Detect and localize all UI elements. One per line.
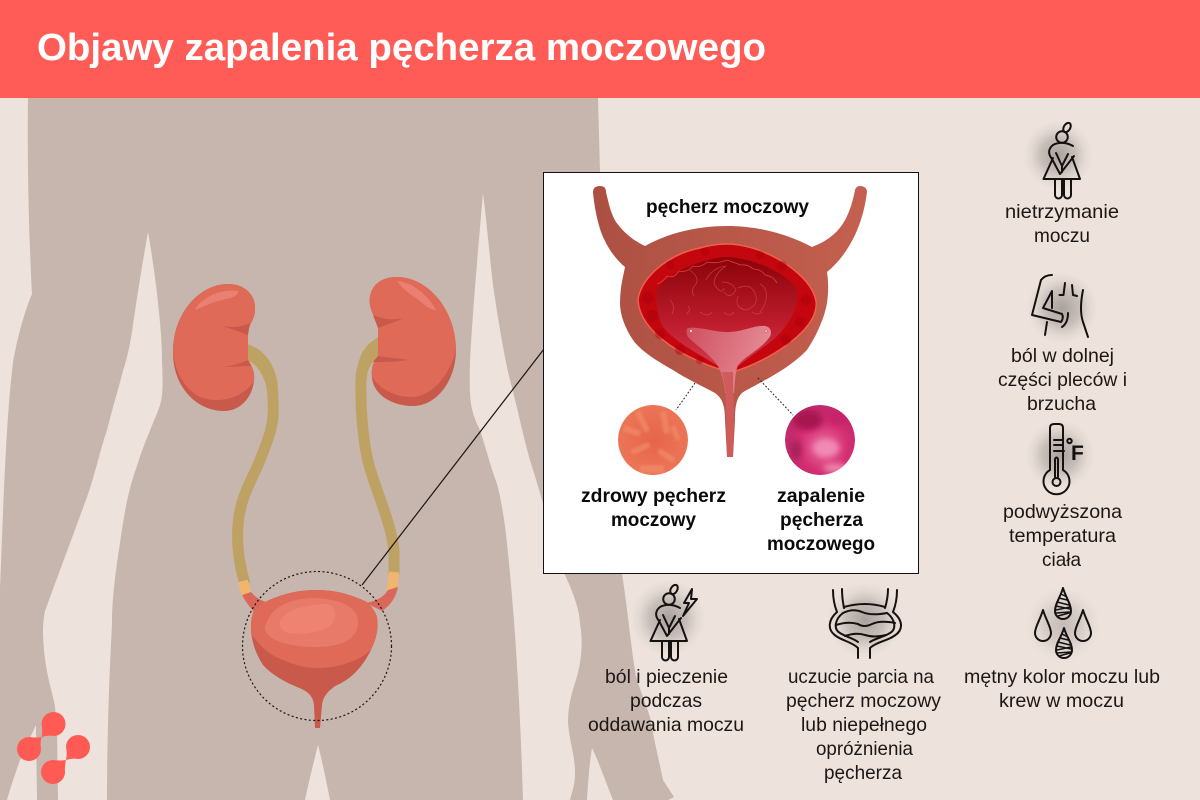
label: [1003, 501, 1122, 571]
symptom: fever: [1003, 420, 1122, 571]
label: brzucha: [1027, 393, 1096, 415]
label: nietrzymanie: [1005, 201, 1119, 223]
label: temperatura: [1009, 525, 1116, 547]
icon: bladder outline: [827, 582, 903, 658]
mucosa folds: [642, 248, 811, 364]
heading: bladder: pęcherz moczowy: [646, 196, 809, 218]
ureter red ends: [242, 587, 398, 612]
label: pęcherza: [824, 762, 902, 784]
label: [786, 666, 941, 784]
icon: thermometer: [1025, 420, 1095, 494]
label: opróżnienia: [816, 738, 913, 760]
symptom: cloudy urine or blood: [964, 587, 1160, 712]
logo: [17, 712, 90, 784]
vessel squiggles: [670, 266, 766, 315]
icon: woman with lightning: [630, 580, 706, 660]
label: healthy bladder: moczowy: [611, 509, 696, 531]
zoom connector line: [362, 349, 544, 585]
right kidney: [370, 277, 456, 406]
label: mętny kolor moczu lub: [964, 666, 1160, 688]
label: inflamed bladder: moczowego: [767, 533, 875, 555]
label: ból i pieczenie: [605, 666, 728, 688]
label: inflamed bladder: pęcherza: [780, 509, 863, 531]
ureter orange segments: [243, 572, 394, 596]
urinary tract illustration: [173, 277, 544, 735]
panel: bladder detail: [544, 172, 918, 574]
bladder: [250, 590, 378, 728]
icon: woman holding abdomen: [1023, 120, 1093, 198]
dotted connector healthy: [676, 383, 695, 410]
label: healthy bladder: [581, 485, 726, 531]
label: moczu: [1034, 225, 1090, 247]
body silhouette: [0, 98, 674, 800]
label: [588, 666, 744, 736]
symptom: incontinence: [1005, 120, 1119, 247]
left kidney: [173, 284, 255, 411]
symptom: urge and incomplete emptying: [786, 582, 941, 784]
label: części pleców i: [998, 369, 1127, 391]
label: [964, 666, 1160, 712]
symptom: back and abdomen pain: [998, 272, 1127, 415]
label: ból w dolnej: [1011, 345, 1114, 367]
left ureter: [238, 344, 278, 584]
label: inflamed bladder: [767, 485, 875, 555]
icon: thermometer: F: [1071, 442, 1084, 465]
title banner: [0, 0, 1200, 98]
dotted zoom circle: [242, 572, 392, 720]
urethra: [722, 372, 734, 457]
title banner: Objawy zapalenia pęcherza moczowego: [37, 27, 766, 69]
right ureter: [356, 337, 394, 574]
icon: torso with arm: [1026, 272, 1098, 344]
label: healthy bladder: zdrowy pęcherz: [581, 485, 726, 507]
label: ciała: [1042, 549, 1081, 571]
label: lub niepełnego: [801, 714, 927, 736]
label: [1005, 201, 1119, 247]
trigone: [686, 326, 771, 393]
inflamed tissue circle: [785, 405, 855, 475]
label: oddawania moczu: [588, 714, 744, 736]
icon: drops: [1025, 587, 1101, 663]
label: uczucie parcia na: [788, 666, 934, 688]
healthy tissue circle: [618, 405, 688, 475]
bladder cross-section: [593, 186, 867, 457]
label: pęcherz moczowy: [786, 690, 941, 712]
label: krew w moczu: [999, 690, 1124, 712]
label: [998, 345, 1127, 415]
label: podwyższona: [1003, 501, 1122, 523]
dotted connector inflamed: [758, 378, 793, 415]
label: inflamed bladder: zapalenie: [777, 485, 865, 507]
label: podczas: [630, 690, 702, 712]
symptom: burning pain when urinating: [588, 580, 744, 736]
